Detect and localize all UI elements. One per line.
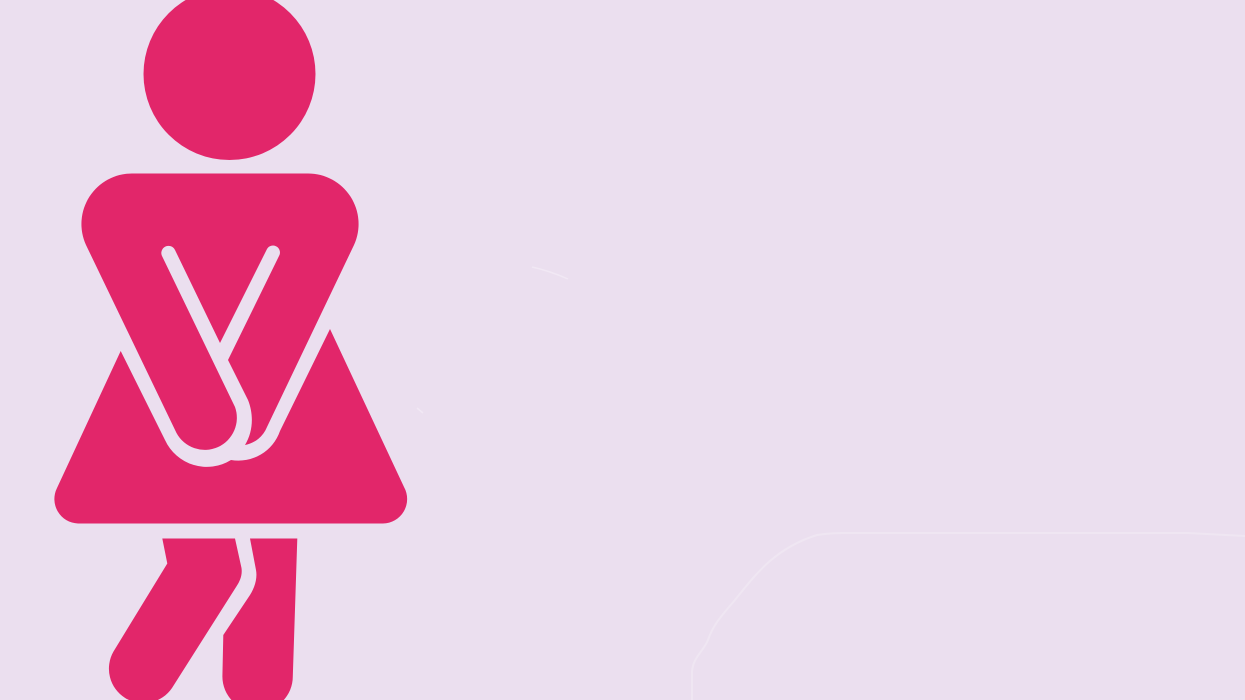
faint trace: small speck xyxy=(417,408,423,413)
icon: torso and crossed arms xyxy=(81,173,359,450)
icon: left leg xyxy=(109,538,242,700)
icon: head xyxy=(144,0,316,160)
icon: skirt xyxy=(54,329,407,524)
faint trace: large rounded outline xyxy=(692,533,1245,700)
icon: right leg xyxy=(222,538,297,700)
faint trace: short streak xyxy=(532,267,568,279)
